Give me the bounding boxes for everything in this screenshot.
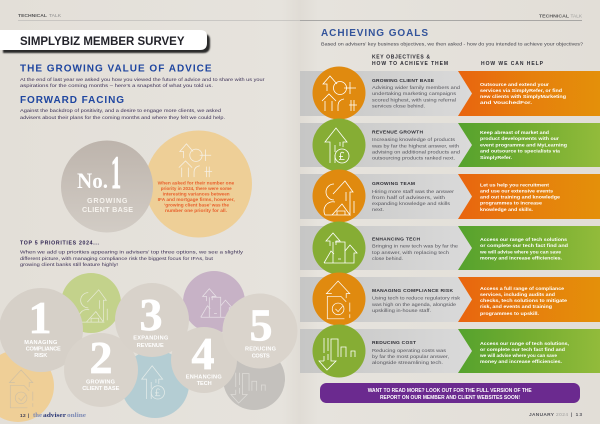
row 3: growing team: and out training and knowledge xyxy=(480,194,560,200)
priority 5: REDUCING xyxy=(245,347,276,353)
page header: right: TALK xyxy=(570,14,583,18)
row 2: revenue growth: advising on additional products and xyxy=(372,150,460,156)
row 2: revenue growth: event programme and MyLearning xyxy=(480,142,567,148)
row 2: revenue growth: was by far the highest answer, with xyxy=(372,144,459,150)
priority 3: 3 xyxy=(140,289,162,340)
call to action banner: REPORT ON OUR MEMBER AND CLIENT WEBSITES SOON! xyxy=(380,395,520,401)
priority 3: REVENUE xyxy=(137,343,164,349)
row 1: growing client base: Advising wider family members and xyxy=(372,85,460,91)
row 5: managing compliance risk: MANAGING COMPLIANCE RISK xyxy=(372,288,453,294)
priority 1: RISK xyxy=(34,353,47,359)
orange circle callout: When asked for their number one xyxy=(158,180,235,186)
heading: top 5 priorities: TOP 5 PRIORITIES 2024... xyxy=(20,240,100,246)
priority 4: 4 xyxy=(192,328,214,379)
priority 2 xyxy=(64,332,138,407)
row 2: revenue growth: Keep abreast of market and xyxy=(480,130,549,136)
top 5 text: When we add up priorities appearing in advisers’ top three options, we see a slightly xyxy=(20,250,244,256)
row 1: growing client base: new clients with SimplyMarketing xyxy=(480,94,566,100)
row 2: revenue growth: product developments with our xyxy=(480,136,559,142)
icon circle: purple tech xyxy=(183,271,245,333)
row 4: enhancing tech: top answer, with replacing tech xyxy=(372,250,449,256)
row 6: reducing cost: by far the most popular answer, xyxy=(372,354,449,360)
number one circle: No. xyxy=(77,168,108,193)
page header: right xyxy=(300,14,583,21)
priority 2: CLIENT BASE xyxy=(82,386,120,392)
page header: right: TECHNICAL xyxy=(539,14,569,18)
priority 1: 1 xyxy=(28,292,52,343)
icon circle: blue revenue xyxy=(121,350,189,418)
number one circle: 1 xyxy=(111,147,121,199)
call to action banner: WANT TO READ MORE? LOOK OUT FOR THE FULL VERSION OF THE xyxy=(368,388,532,394)
orange circle callout: number one priority for all. xyxy=(165,208,227,213)
number one circle: GROWING xyxy=(87,196,128,205)
row 4: enhancing tech: or complete our tech fact find and xyxy=(480,243,568,249)
row 5: managing compliance risk: was high on the agenda, alongside xyxy=(372,302,456,308)
row 3: growing team: and use our extensive events xyxy=(480,188,553,194)
row 4: enhancing tech: Access our range of tech solutions xyxy=(480,237,567,243)
left footer: adviser xyxy=(43,413,66,419)
row 5: managing compliance risk: upskilling in-house staff. xyxy=(372,308,431,314)
row 2: revenue growth: SimplyRefer. xyxy=(480,155,512,161)
row 5: managing compliance risk: Access a full range of compliance xyxy=(480,286,564,292)
row 4: enhancing tech xyxy=(300,222,600,274)
row 1: growing client base: Outsource and extend your xyxy=(480,82,549,88)
right footer: | 13 xyxy=(571,412,582,418)
priority 5: 5 xyxy=(250,300,272,351)
orange circle callout: IFA and mortgage firms, however, xyxy=(158,197,235,202)
icon circle: orange compliance xyxy=(0,350,54,422)
achieving goals intro: Based on advisers’ key business objectives, we then asked - how do you intended to achieve your objectives? xyxy=(321,42,583,48)
row 1: growing client base: undertaking marketing campaigns xyxy=(372,91,457,97)
icon circle: green team xyxy=(61,273,121,333)
orange circle callout xyxy=(145,130,252,238)
priority 3: EXPANDING xyxy=(133,336,168,342)
forward facing text: Against the backdrop of positivity, and a desire to engage more clients, we asked xyxy=(20,108,221,114)
intro text xyxy=(20,77,265,89)
row 3: growing team: knowledge and skills. xyxy=(480,207,533,213)
row 6: reducing cost xyxy=(300,324,600,378)
orange circle callout: priority in 2024, there were some xyxy=(161,186,232,191)
right footer: JANUARY xyxy=(529,412,555,418)
column heading: key objectives: KEY OBJECTIVES & xyxy=(372,54,430,60)
left footer xyxy=(20,413,86,419)
heading: forward facing: FORWARD FACING xyxy=(20,95,124,106)
intro text: At the end of last year we asked you how you viewed the future of advice and to share with us your xyxy=(20,77,265,83)
row 6: reducing cost: Access our range of tech solutions, xyxy=(480,341,570,347)
row 4: enhancing tech: Bringing in new tech was by far the xyxy=(372,244,458,250)
row 3: growing team: next. xyxy=(372,207,384,213)
priority 4: TECH xyxy=(197,381,212,387)
title banner xyxy=(0,30,210,53)
top 5 text: growing client banks still feature highly! xyxy=(20,262,118,268)
row 2: revenue growth: Increasing knowledge of products xyxy=(372,137,456,143)
row 6: reducing cost: Reducing operating costs was xyxy=(372,348,447,354)
page header: left: TALK xyxy=(49,13,62,18)
column heading: key objectives xyxy=(372,54,448,67)
row 3: growing team: programmes to increase xyxy=(480,200,542,206)
row 1: growing client base: services close behind. xyxy=(372,104,425,110)
priority 3 xyxy=(115,283,189,357)
top 5 text xyxy=(20,250,244,268)
right footer xyxy=(529,412,582,418)
intro text: aspirations for the coming months – here’s a snapshot of what you told us. xyxy=(20,83,213,89)
priority 2: GROWING xyxy=(86,380,115,386)
row 6: reducing cost: alongside streamlining tech. xyxy=(372,360,443,366)
number one circle xyxy=(61,140,153,232)
row 6: reducing cost: money and increase efficiencies. xyxy=(480,359,562,365)
row 5: managing compliance risk: checks, tech solutions to mitigate xyxy=(480,298,567,304)
right footer: 2024 xyxy=(556,412,568,418)
heading: achieving goals: ACHIEVING GOALS xyxy=(321,28,428,39)
row 6: reducing cost: we will advise where you can save xyxy=(479,353,557,359)
priority 2: 2 xyxy=(90,332,112,383)
left footer: 12 | xyxy=(20,413,29,419)
row 2: revenue growth xyxy=(300,118,600,172)
icon circle: grey costs xyxy=(223,348,285,410)
priority 4: ENHANCING xyxy=(186,374,222,380)
priority 1: COMPLIANCE xyxy=(26,347,61,353)
call to action banner xyxy=(320,383,580,403)
row 1: growing client base: GROWING CLIENT BASE xyxy=(372,78,435,84)
row 3: growing team: Let us help you recruitment xyxy=(480,182,549,188)
number one circle: CLIENT BASE xyxy=(82,205,133,214)
orange circle callout: ‘growing client base’ was the xyxy=(164,202,229,208)
row 2: revenue growth: REVENUE GROWTH xyxy=(372,130,423,136)
row 3: growing team xyxy=(300,170,600,222)
row 5: managing compliance risk: risk, and events and training xyxy=(480,304,552,310)
page header: left xyxy=(18,13,300,21)
row 4: enhancing tech: we will advise where you can save xyxy=(479,250,561,256)
row 3: growing team: GROWING TEAM xyxy=(372,181,415,187)
row 1: growing client base: and VouchedFor. xyxy=(480,100,532,106)
priority 1 xyxy=(0,288,83,372)
row 4: enhancing tech: close behind. xyxy=(372,256,403,262)
priority 5: COSTS xyxy=(252,353,270,359)
row 3: growing team: expanding knowledge and skills xyxy=(372,201,451,207)
left footer: online xyxy=(67,413,86,419)
heading: the growing value of advice: THE GROWING VALUE OF ADVICE xyxy=(20,64,212,74)
column heading: key objectives: HOW TO ACHIEVE THEM xyxy=(372,61,448,67)
left footer: the xyxy=(33,413,42,419)
row 4: enhancing tech: ENHANCING TECH xyxy=(372,236,420,242)
column heading: how we can help: HOW WE CAN HELP xyxy=(481,61,544,67)
row 6: reducing cost: or complete our tech fact find and xyxy=(480,347,565,353)
priority 1: MANAGING xyxy=(24,340,57,346)
row 4: enhancing tech: money and increase efficiencies. xyxy=(480,256,562,262)
orange circle callout: interesting variances between xyxy=(163,192,230,196)
forward facing text xyxy=(20,108,225,121)
row 1: growing client base: scored highest, with using referral xyxy=(372,98,456,104)
row 5: managing compliance risk: Using tech to reduce regulatory risk xyxy=(372,296,461,302)
top 5 text: different picture, with managing compliance risk the biggest focus for IFAs, but xyxy=(20,256,214,262)
forward facing text: advisers about their plans for the coming months and where they felt we could help. xyxy=(20,115,225,121)
priority 5 xyxy=(222,294,298,368)
title banner: SIMPLYBIZ MEMBER SURVEY xyxy=(20,36,185,48)
row 1: growing client base xyxy=(300,66,600,120)
row 5: managing compliance risk xyxy=(300,272,600,326)
row 1: growing client base: services via SimplyRefer, or find xyxy=(480,88,562,94)
icon: client growth xyxy=(179,144,212,177)
row 3: growing team: from half of advisers, with xyxy=(372,195,445,201)
row 3: growing team: Hiring more staff was the answer xyxy=(372,189,454,195)
row 5: managing compliance risk: services, including audits and xyxy=(480,292,555,298)
page header: left: TECHNICAL xyxy=(18,13,47,18)
row 2: revenue growth: and outsource to specialists via xyxy=(480,148,560,154)
row 2: revenue growth: outsourcing products ranked next. xyxy=(372,156,455,162)
row 6: reducing cost: REDUCING COST xyxy=(372,340,416,346)
row 5: managing compliance risk: programmes to upskill. xyxy=(480,311,539,317)
priority 4 xyxy=(171,327,237,393)
